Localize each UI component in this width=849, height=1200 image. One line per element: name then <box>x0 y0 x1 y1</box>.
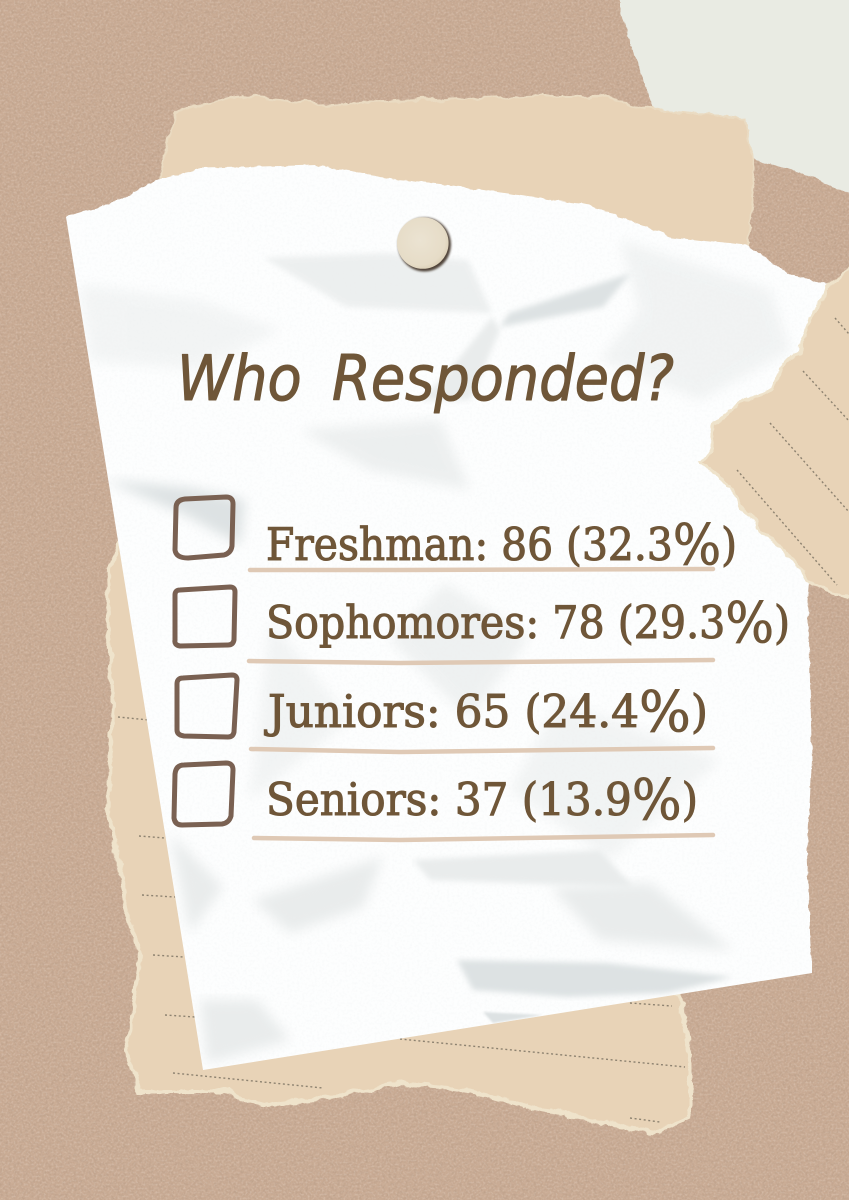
underline <box>250 569 713 570</box>
list item: Sophomores <box>175 587 790 663</box>
checkbox <box>174 763 233 825</box>
label: % <box>725 591 774 656</box>
list item: Juniors <box>177 675 713 752</box>
pin <box>397 217 451 272</box>
label: ) <box>682 773 698 826</box>
label: Seniors: 37 (13.9 <box>266 773 657 826</box>
label: Sophomores: 78 (29.3 <box>266 596 769 649</box>
checkbox <box>177 675 237 737</box>
label: % <box>639 680 691 745</box>
torn tan paper, behind top <box>161 96 755 300</box>
label: ) <box>721 518 737 571</box>
torn tan paper, behind bottom <box>108 540 690 1133</box>
checkbox <box>175 587 235 646</box>
underline <box>251 748 713 752</box>
label: Freshman: 86 (32.3 <box>266 518 715 571</box>
list item: Seniors <box>174 763 713 840</box>
checkbox <box>175 497 233 558</box>
crumpled white note paper <box>50 160 840 1085</box>
title: Who Responded? <box>177 342 674 415</box>
torn light paper, top right <box>620 0 849 194</box>
torn tan paper, right side <box>700 262 849 599</box>
label: % <box>673 513 721 578</box>
label: % <box>632 768 682 833</box>
underline <box>254 835 713 840</box>
label: Juniors: 65 (24.4 <box>268 685 649 738</box>
list item: Freshman <box>175 497 737 578</box>
paper creases <box>82 242 788 1063</box>
underline <box>249 660 713 663</box>
label: ) <box>774 596 790 649</box>
label: ) <box>691 685 708 738</box>
